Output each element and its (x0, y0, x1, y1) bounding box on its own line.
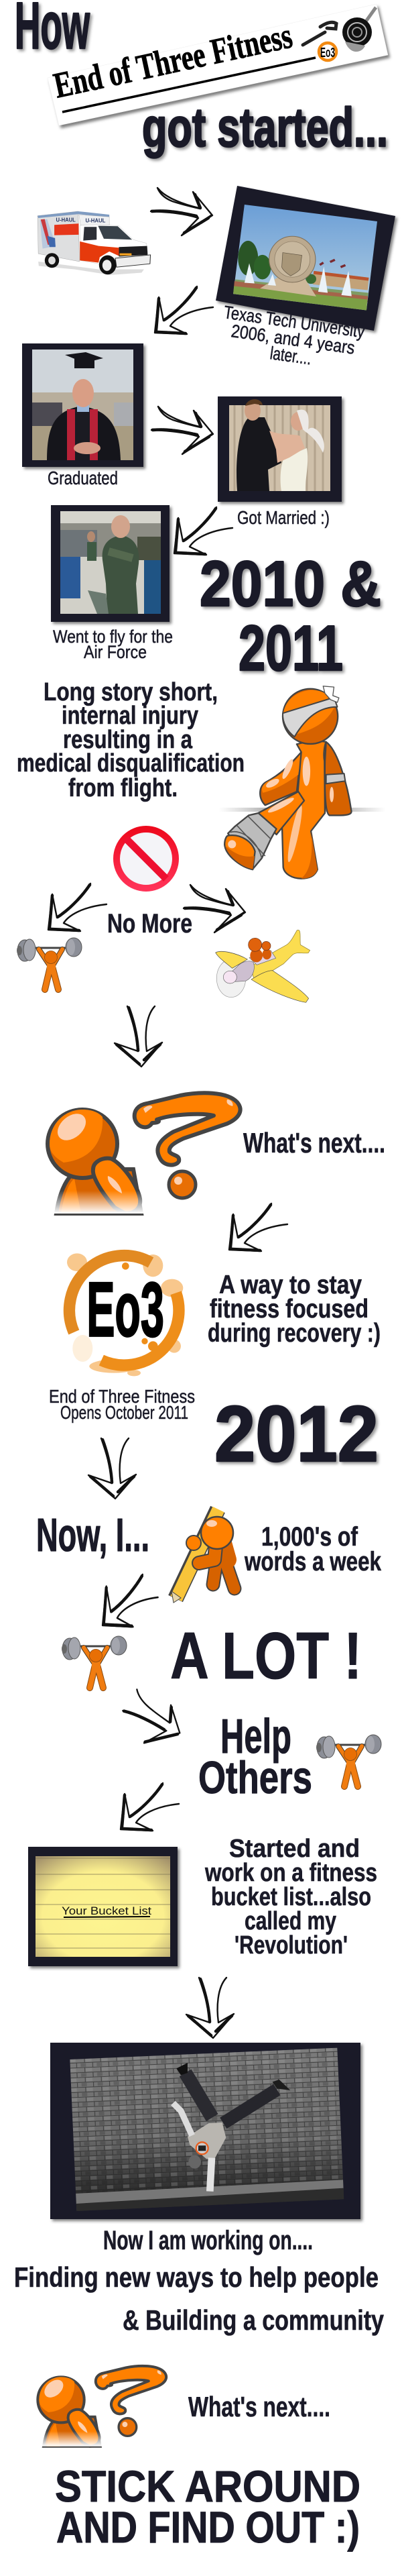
text block: injury story (17, 678, 245, 802)
icon: hammer (303, 22, 336, 45)
photo: bucket list (28, 1847, 178, 1966)
icon: barbell (342, 7, 376, 52)
arrow: to handstand photo (186, 1978, 234, 2038)
icon: small Eo3 badge (319, 43, 336, 60)
photo: Texas Tech seal (216, 186, 395, 331)
caption: End of Three Fitness opens: End of Three Fitness (49, 1386, 195, 1407)
arrow: no more left (48, 883, 107, 931)
arrow: to bucket list (121, 1783, 179, 1831)
year heading: 2010 & 2011 (200, 548, 381, 684)
arrow: truck to university (151, 188, 212, 235)
year heading: 2010 & 2011: 2010 & (200, 548, 381, 620)
text: Now I am working on: Now I am working on.... (103, 2226, 313, 2255)
text block: bucket list revolution (204, 1835, 377, 1960)
icon: orange figure lifting barbell (62, 1636, 127, 1688)
notepad image (36, 1856, 170, 1957)
caption: air force: Air Force (84, 642, 147, 662)
caption: Texas Tech: Texas Tech University (222, 302, 366, 342)
text block: a way to stay fitness focused: A way to stay (219, 1271, 362, 1299)
heading: Help Others: Others (198, 1752, 312, 1803)
caption: End of Three Fitness opens (49, 1386, 195, 1423)
icon: thinking figure with question mark (46, 1093, 241, 1214)
notepad text: Your Bucket List (62, 1904, 151, 1917)
arrow: down to now (88, 1438, 136, 1499)
year heading: 2010 & 2011: 2011 (239, 612, 343, 684)
closing heading (55, 2461, 360, 2552)
arrow: wedding to air force (174, 507, 232, 555)
photo: air force (51, 505, 170, 622)
arrow: no more right (184, 885, 245, 932)
text block: injury story: resulting in a (63, 726, 193, 754)
text block: injury story: internal injury (62, 702, 198, 730)
caption: Texas Tech: 2006, and 4 years (230, 321, 356, 358)
truck logo lettering: U-HAUL (56, 217, 76, 223)
caption: air force (53, 627, 173, 662)
text block: injury story: medical disqualification (17, 749, 245, 777)
arrow: down to what's next (115, 1006, 162, 1067)
arrow: to recovery (229, 1203, 287, 1251)
label: words a week (244, 1522, 382, 1576)
brick wall image (67, 2046, 346, 2212)
icon: orange figure lifting barbell (17, 938, 82, 989)
caption: air force: Went to fly for the (53, 627, 173, 647)
icon: orange figure lifting barbell (316, 1735, 381, 1786)
label: No More: No More (107, 909, 192, 938)
arrow: graduation to wedding (151, 407, 213, 454)
label: What's next: What's next.... (188, 2391, 330, 2422)
icon: no symbol (117, 829, 176, 888)
heading: Help Others (198, 1710, 312, 1803)
icon: U-Haul truck (38, 211, 151, 275)
arrow: university to graduation (155, 286, 213, 334)
banner: End of Three Fitness (48, 4, 388, 125)
heading: Help Others: Help (220, 1710, 291, 1764)
icon: yellow airplane with pilots (216, 930, 310, 1002)
icon: thinking figure with question mark (37, 2366, 166, 2447)
photo: wedding (218, 396, 342, 502)
text block: a way to stay fitness focused (208, 1271, 381, 1348)
photo: graduation (22, 343, 143, 467)
photo: handstand (50, 2043, 360, 2219)
text block: bucket list revolution: Started and (229, 1835, 360, 1863)
icon: injured orange figure (219, 686, 386, 879)
icon: orange figure with pencil (172, 1509, 234, 1603)
text block: a way to stay fitness focused: fitness focused (210, 1295, 368, 1324)
banner title text: End of Three Fitness (50, 15, 295, 106)
icon: small Eo3 badge: Eo3 (320, 46, 335, 60)
caption: Got Married: Got Married :) (237, 507, 330, 528)
text block: bucket list revolution: called my (245, 1907, 336, 1935)
text block: injury story: Long story short, (44, 678, 218, 706)
logo: Eo3 (67, 1253, 183, 1376)
heading: A LOT: A LOT ! (170, 1619, 362, 1693)
heading: Now, I: Now, I... (36, 1509, 149, 1561)
caption: End of Three Fitness opens: Opens October 2011 (60, 1402, 188, 1423)
photo image (60, 511, 161, 614)
caption: Texas Tech: later.... (269, 343, 313, 369)
photo image (233, 205, 377, 310)
arrow: to lifter (103, 1574, 158, 1627)
caption: Graduated: Graduated (48, 468, 118, 488)
arrow: to help others (123, 1689, 180, 1743)
truck logo lettering: U-HAUL (85, 218, 105, 224)
logo lettering: Eo3 (86, 1267, 164, 1353)
photo image (229, 399, 330, 491)
caption: Texas Tech (222, 302, 366, 369)
label: words a week: 1,000's of (261, 1522, 358, 1552)
text block: bucket list revolution: 'Revolution' (234, 1931, 348, 1960)
photo image (32, 350, 133, 460)
year heading: 2012: 2012 (214, 1390, 379, 1479)
text block: injury story: from flight. (68, 774, 178, 802)
closing heading: STICK AROUND (55, 2461, 360, 2511)
